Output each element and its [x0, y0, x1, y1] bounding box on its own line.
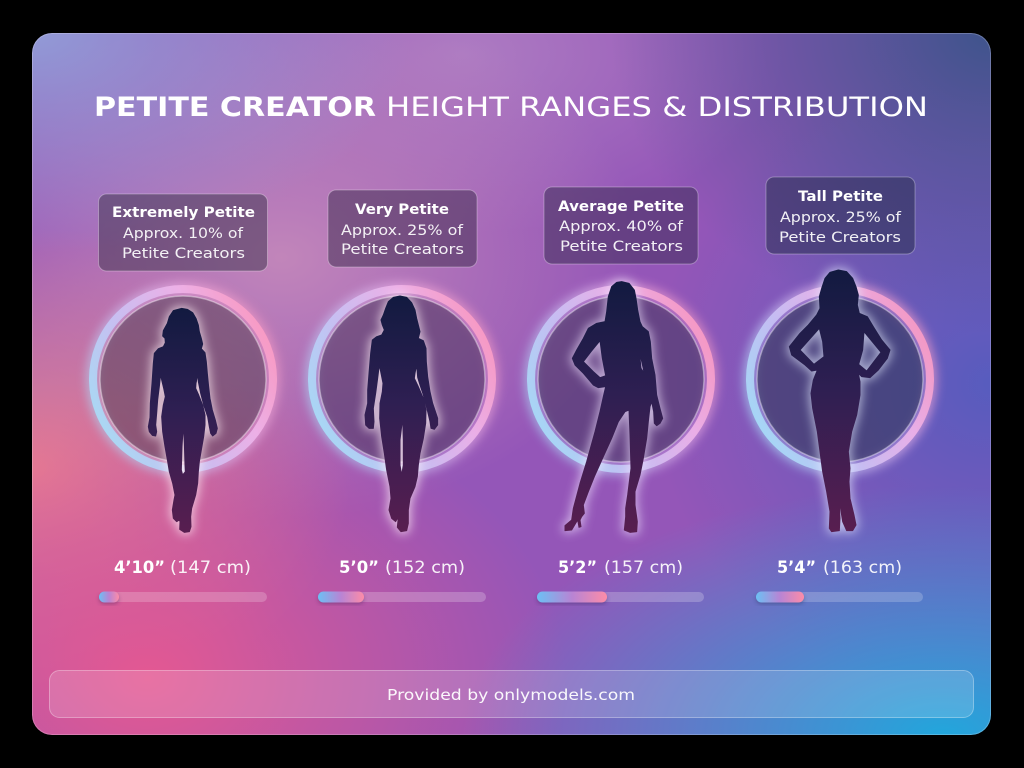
silhouette: tall petite [789, 270, 890, 532]
height: 5'4" [777, 558, 902, 578]
bar: 40% [537, 592, 704, 604]
label: extremely petite: Approx. 10% of [123, 226, 244, 242]
height: 5'2": (157 cm) [604, 558, 683, 578]
height: 5'2" [558, 558, 683, 578]
label: average petite: Average Petite [558, 199, 684, 215]
label: extremely petite: Extremely Petite [112, 205, 255, 221]
label: very petite [328, 190, 477, 267]
height: 5'2": 5’2” [558, 558, 597, 578]
ring: very petite [311, 288, 493, 470]
silhouette: average petite [565, 282, 663, 532]
label: tall petite [766, 177, 915, 254]
footer bar: Provided by onlymodels.com [387, 686, 635, 704]
height: 4'10": (147 cm) [170, 558, 251, 578]
title: PETITE CREATOR [94, 92, 376, 123]
height: 5'0": 5’0” [339, 558, 379, 578]
footer bar [50, 670, 974, 718]
label: very petite: Petite Creators [341, 242, 464, 258]
label: tall petite: Approx. 25% of [780, 210, 902, 226]
title: HEIGHT RANGES & DISTRIBUTION [386, 92, 928, 123]
label: average petite: Approx. 40% of [559, 219, 684, 235]
height: 4'10": 4’10” [114, 558, 165, 578]
ring: average petite [530, 288, 712, 470]
bar: 25% [318, 592, 486, 604]
bar: 25% [756, 592, 923, 604]
label: very petite: Very Petite [355, 202, 449, 218]
silhouette: extremely petite [148, 308, 217, 532]
label: tall petite: Petite Creators [779, 230, 901, 246]
label: extremely petite: Petite Creators [122, 246, 245, 262]
height: 5'4": (163 cm) [823, 558, 902, 578]
bar: 10% [99, 592, 267, 604]
label: very petite: Approx. 25% of [341, 223, 464, 239]
ring: tall petite [749, 288, 931, 470]
label: average petite [544, 187, 698, 264]
height: 5'0" [339, 558, 465, 578]
height: 5'4": 5’4” [777, 558, 816, 578]
height: 5'0": (152 cm) [385, 558, 465, 578]
label: tall petite: Tall Petite [798, 189, 883, 205]
label: extremely petite [98, 194, 268, 271]
title [94, 92, 928, 123]
height: 4'10" [114, 558, 251, 578]
ring: extremely petite [92, 288, 274, 470]
silhouette: very petite [365, 296, 438, 532]
label: average petite: Petite Creators [560, 239, 683, 255]
